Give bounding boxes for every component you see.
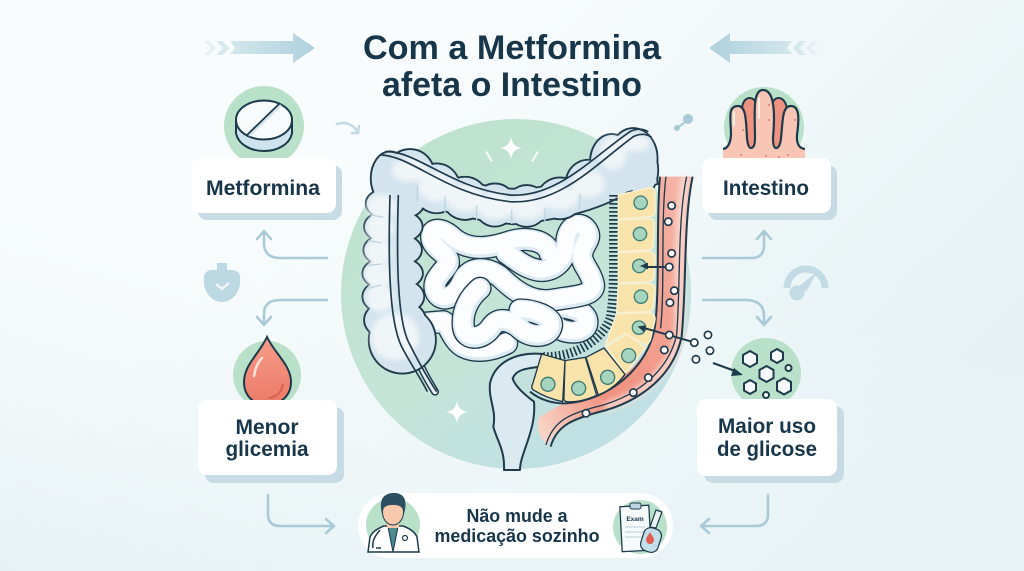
warning text: medicação sozinho — [434, 525, 600, 546]
background disc — [341, 119, 691, 469]
icon: gauge — [787, 269, 825, 300]
title: afeta o Intestino — [382, 66, 642, 104]
label — [717, 415, 817, 461]
icon: villi — [723, 87, 805, 167]
warning text: Não mude a — [466, 505, 568, 526]
intestinal cells — [532, 188, 655, 402]
small curved arrow icon — [337, 123, 359, 133]
central illustration: digestive tract — [341, 119, 714, 470]
small intestine — [403, 224, 594, 350]
label: Intestino — [723, 177, 809, 200]
connector arrows — [257, 231, 771, 533]
label — [226, 416, 309, 461]
small connection dot icon — [674, 114, 693, 131]
large intestine — [363, 129, 657, 392]
sparkles — [446, 137, 539, 423]
icon: doctor — [366, 493, 420, 552]
card — [205, 407, 344, 483]
icon: exam clipboard and glucometer — [613, 500, 667, 554]
arrow: top right decorative arrow — [709, 33, 818, 63]
microvilli — [543, 195, 614, 357]
card — [198, 165, 342, 220]
card — [708, 165, 837, 220]
panel: Maior uso de glicose — [697, 338, 844, 483]
blood vessel — [530, 177, 693, 447]
icon: pill — [224, 86, 304, 166]
title: Com a Metformina — [363, 29, 662, 67]
rectum — [490, 354, 543, 470]
label: de glicose — [717, 438, 817, 461]
label: glicemia — [226, 438, 309, 461]
arrow: glucose into circle — [713, 363, 743, 376]
panel: Intestino — [702, 87, 837, 220]
icon: downward check badge — [204, 263, 240, 302]
panel: Metformina — [192, 86, 342, 220]
icon: glucose hexagons — [731, 338, 801, 408]
label: Metformina — [206, 177, 320, 200]
panel: Menor glicemia — [198, 337, 344, 483]
card — [704, 406, 844, 483]
arrow: top left decorative arrow — [204, 33, 315, 63]
pill background — [358, 493, 673, 558]
label: Menor — [236, 416, 298, 439]
panel: warning pill — [358, 493, 673, 558]
warning text — [434, 505, 600, 546]
glucose particles and uptake arrows — [582, 202, 714, 417]
label: Maior uso — [718, 415, 816, 438]
icon: blood drop — [233, 337, 301, 409]
icon: exam clipboard and glucometer: Exam — [626, 516, 644, 523]
title — [363, 29, 662, 104]
